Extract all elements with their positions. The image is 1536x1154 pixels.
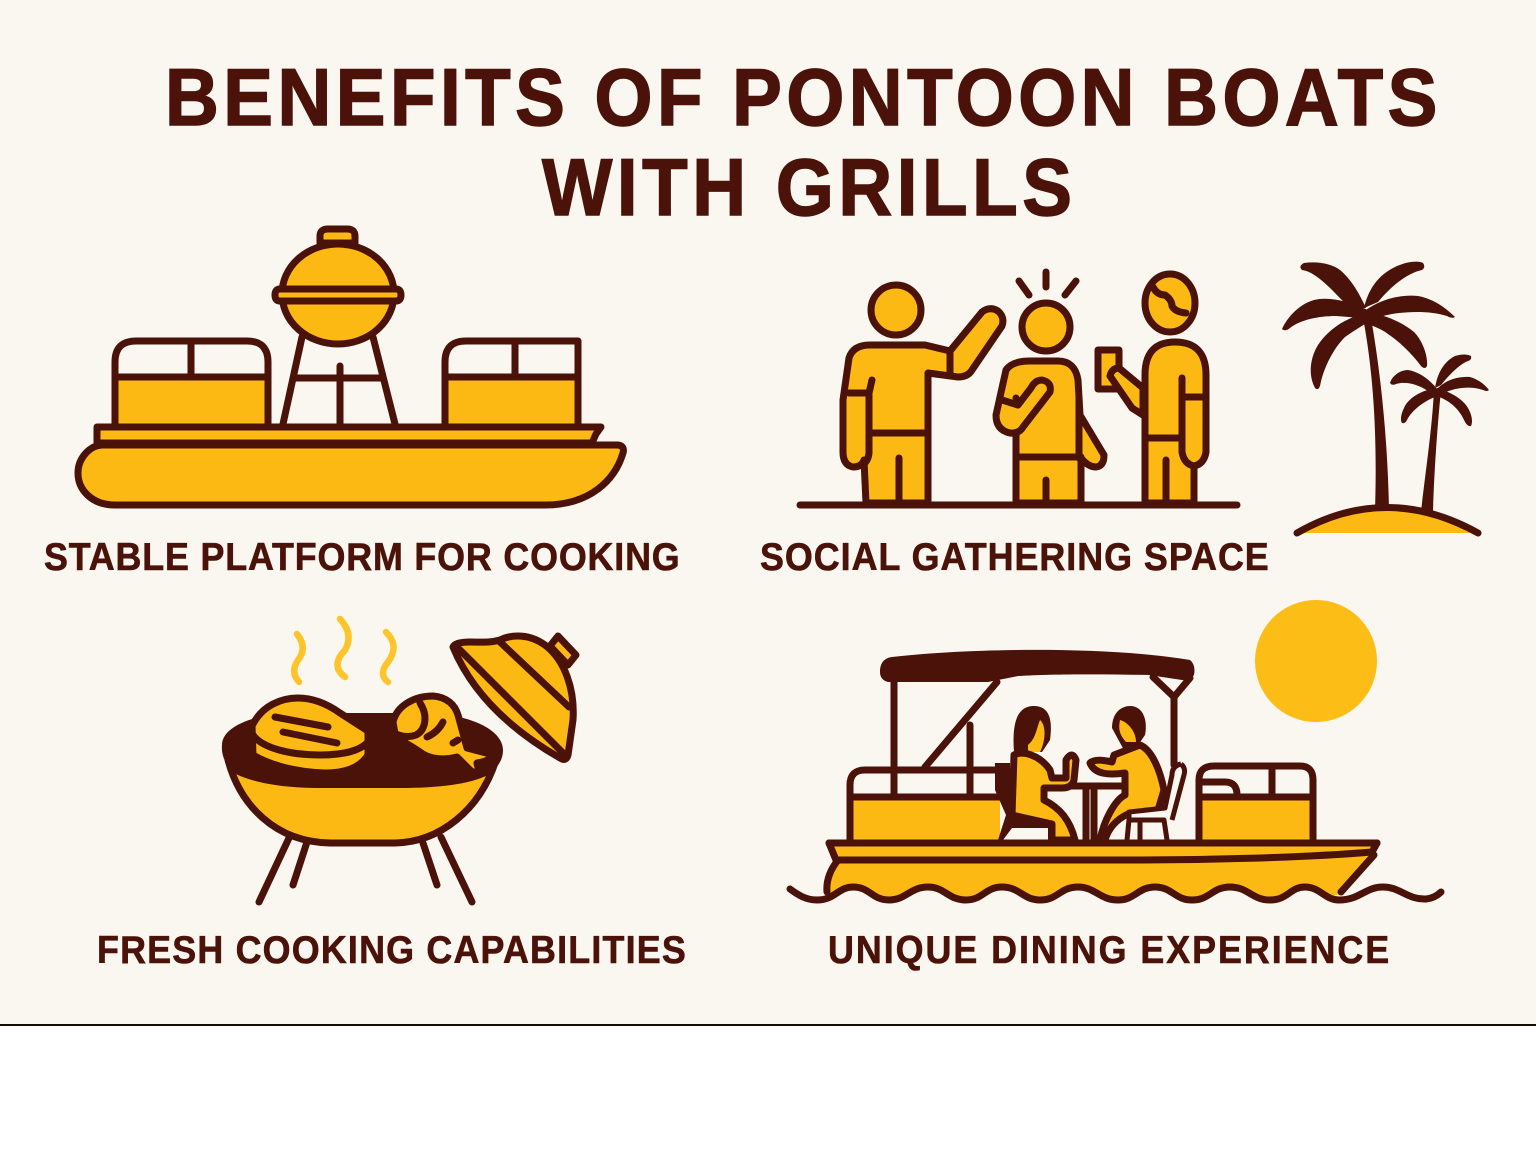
person one waving [843,285,1003,503]
icon: open grill with food [222,619,576,902]
seating [850,766,1313,840]
title: BENEFITS OF PONTOON BOATS [165,53,1437,143]
diners and table [995,706,1185,840]
panel: social gathering space [760,262,1489,578]
person two with raised hand [996,272,1104,503]
icon: pontoon boat with kettle grill [78,229,623,505]
person three with phone [1098,274,1206,503]
grill legs [259,837,472,902]
icon: sun [1255,600,1377,722]
ground line [800,502,1237,508]
hull [827,843,1377,900]
label: social gathering: SOCIAL GATHERING SPACE [760,535,1269,578]
steak [252,698,368,773]
icon: pontoon boat with diners [790,650,1441,900]
water waves [790,887,1441,900]
panel: unique dining experience [790,600,1441,971]
label: fresh cooking: FRESH COOKING CAPABILITIES [97,928,686,971]
icon: palm trees on island [1282,262,1489,533]
icon: three people socializing [800,272,1237,505]
steam [294,619,394,682]
panel: fresh cooking capabilities [97,619,686,971]
lid [453,636,576,759]
label: unique dining: UNIQUE DINING EXPERIENCE [828,928,1389,971]
chicken drumstick [393,696,491,773]
title: WITH GRILLS [542,143,1072,233]
canopy [880,650,1194,797]
label: stable platform: STABLE PLATFORM FOR COOKING [44,535,680,578]
title [165,53,1437,233]
grill bowl [228,760,496,843]
panel: stable platform for cooking [44,229,680,578]
